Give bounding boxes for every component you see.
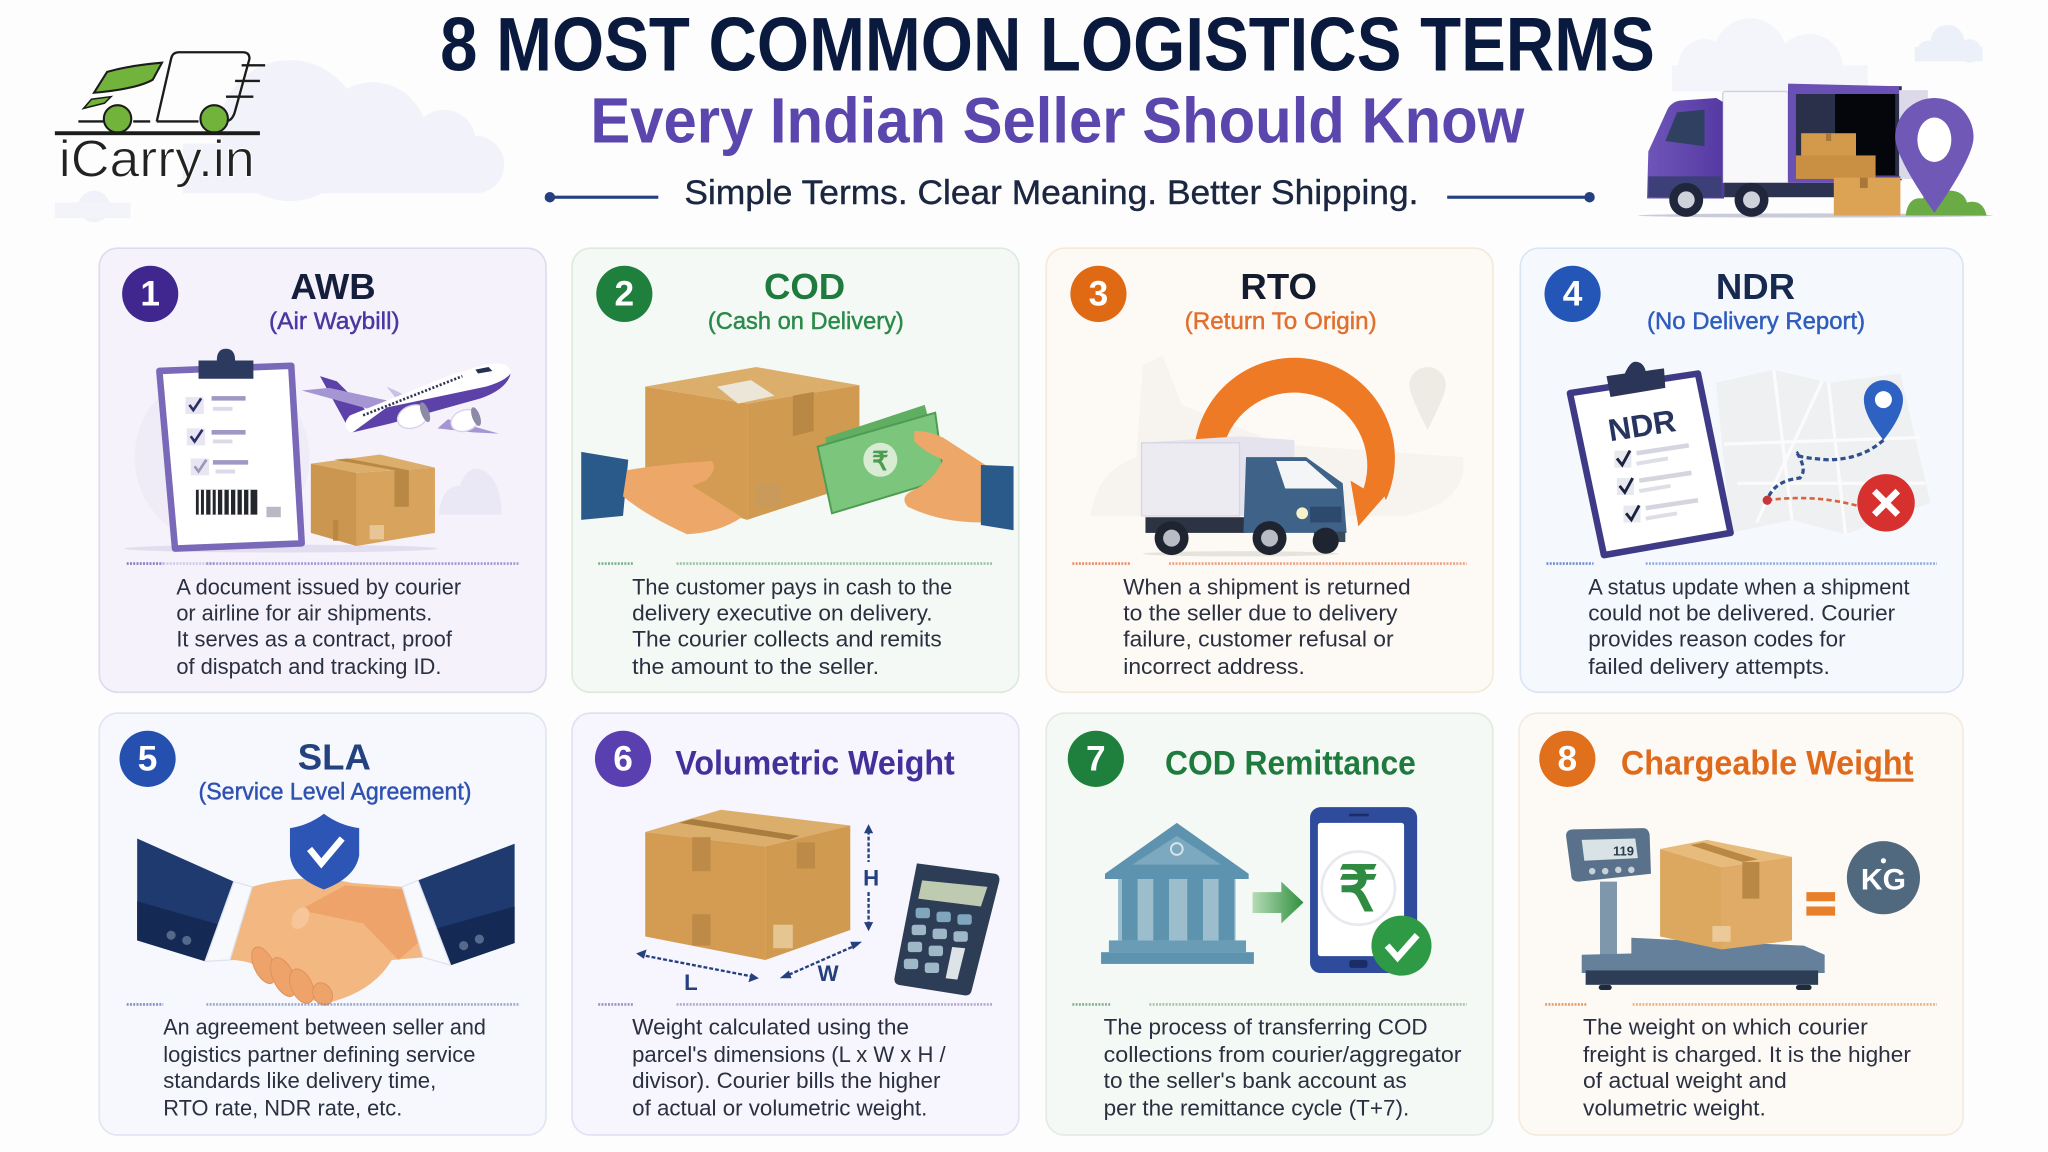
scale	[1566, 828, 1825, 990]
logo: iCarry.in	[55, 52, 265, 188]
card background	[1046, 248, 1493, 692]
plane	[302, 363, 511, 435]
number badge 7	[1068, 731, 1124, 787]
panel: AWB	[99, 248, 546, 692]
description: When a shipment is returned	[1123, 574, 1411, 599]
illustration: NDR clipboard and route map: NDR	[1606, 403, 1678, 448]
illustration: parcel handed over for cash: ₹	[872, 446, 889, 476]
description	[176, 574, 462, 679]
number badge 3: 3	[1089, 275, 1108, 314]
divider	[1545, 1003, 1937, 1005]
description: of actual or volumetric weight.	[632, 1095, 927, 1120]
subheading: (No Delivery Report)	[1647, 308, 1865, 335]
number badge 5	[120, 731, 176, 787]
description: volumetric weight.	[1583, 1095, 1766, 1120]
parcel	[311, 455, 435, 546]
scale: 119	[1613, 844, 1634, 859]
description: The process of transferring COD	[1104, 1014, 1428, 1039]
subheading: (Air Waybill)	[269, 308, 400, 335]
illustration: box dimensions and calculator: L	[684, 970, 698, 995]
title: 8 MOST COMMON LOGISTICS TERMS	[440, 3, 1655, 88]
tagline text: Simple Terms. Clear Meaning. Better Shipping.	[684, 174, 1418, 212]
illustration: NDR clipboard and route map	[1570, 362, 1930, 555]
description: The weight on which courier	[1583, 1014, 1868, 1039]
illustration: bank to phone transfer	[1101, 807, 1432, 976]
number badge 6: 6	[613, 740, 633, 779]
divider	[1546, 563, 1937, 565]
heading AWB: AWB	[290, 266, 376, 307]
logo wordmark: iCarry.in	[59, 130, 255, 188]
panel: RTO	[1046, 248, 1493, 692]
description: divisor). Courier bills the higher	[632, 1068, 941, 1093]
card background	[99, 248, 546, 692]
phone	[1310, 807, 1417, 973]
description: could not be delivered. Courier	[1588, 600, 1896, 625]
divider	[598, 1003, 993, 1005]
subheading: (Return To Origin)	[1185, 308, 1377, 335]
number badge 8: 8	[1558, 740, 1577, 779]
illustration: box dimensions and calculator	[636, 810, 999, 995]
parcel	[1660, 840, 1792, 950]
logo truck icon	[55, 52, 265, 135]
subheading: (Cash on Delivery)	[708, 308, 904, 335]
illustration: handshake and shield	[137, 814, 515, 1009]
description	[1583, 1014, 1911, 1120]
divider	[1072, 1003, 1467, 1005]
bank	[1101, 823, 1254, 964]
description: provides reason codes for	[1588, 627, 1846, 652]
description: Weight calculated using the	[632, 1014, 909, 1039]
divider	[127, 1003, 520, 1005]
description: It serves as a contract, proof	[176, 627, 453, 652]
calculator	[894, 863, 999, 995]
illustration: box dimensions and calculator: H	[863, 866, 879, 891]
description: RTO rate, NDR rate, etc.	[163, 1095, 402, 1120]
description: or airline for air shipments.	[176, 600, 432, 625]
number badge 1	[122, 266, 178, 322]
description	[632, 1014, 946, 1120]
dimension arrows	[636, 824, 873, 982]
heading COD: COD	[764, 266, 845, 307]
description: A document issued by courier	[176, 574, 462, 599]
number badge 5: 5	[138, 740, 157, 779]
subheading: (Service Level Agreement)	[199, 778, 472, 805]
heading NDR: NDR	[1716, 266, 1795, 307]
description	[632, 574, 952, 679]
description	[1104, 1014, 1462, 1120]
illustration: clipboard, plane and box	[124, 349, 511, 552]
number badge 2	[596, 266, 652, 322]
description: collections from courier/aggregator	[1104, 1042, 1462, 1067]
number badge 3	[1070, 266, 1127, 322]
check badge	[1371, 916, 1432, 976]
description: failure, customer refusal or	[1123, 627, 1394, 652]
card background	[1520, 248, 1963, 692]
tagline with rules	[545, 174, 1595, 212]
panel: COD Remittance	[1046, 713, 1493, 1135]
heading: Volumetric Weight	[675, 745, 955, 783]
KG weight badge	[1847, 841, 1920, 914]
number badge 1: 1	[140, 275, 160, 314]
transfer arrow	[1253, 882, 1304, 923]
card background	[572, 248, 1019, 692]
description: logistics partner defining service	[163, 1042, 475, 1067]
description	[163, 1014, 486, 1120]
description: per the remittance cycle (T+7).	[1104, 1095, 1409, 1120]
heading RTO: RTO	[1240, 266, 1317, 307]
phone: ₹	[1338, 854, 1378, 924]
heading: COD Remittance	[1165, 745, 1416, 783]
illustration: truck with return arrow	[1091, 355, 1463, 556]
KG weight badge: KG	[1861, 863, 1906, 896]
panel: NDR	[1520, 248, 1963, 692]
description: The courier collects and remits	[632, 627, 942, 652]
description: of dispatch and tracking ID.	[176, 654, 441, 679]
description: of actual weight and	[1583, 1068, 1787, 1093]
description: An agreement between seller and	[163, 1014, 486, 1039]
description: to the seller's bank account as	[1104, 1068, 1407, 1093]
description: the amount to the seller.	[632, 654, 879, 679]
divider	[1072, 563, 1467, 565]
card background	[99, 713, 546, 1135]
card background	[1046, 713, 1493, 1135]
description: The customer pays in cash to the	[632, 574, 952, 599]
number badge 7: 7	[1086, 740, 1106, 779]
description: freight is charged. It is the higher	[1583, 1042, 1911, 1067]
number badge 2: 2	[615, 275, 634, 314]
divider	[598, 563, 993, 565]
panel: COD	[572, 248, 1019, 692]
number badge 6	[595, 731, 651, 787]
heading SLA: SLA	[298, 736, 371, 777]
description	[1123, 574, 1411, 679]
description: incorrect address.	[1123, 654, 1305, 679]
divider	[127, 563, 520, 565]
number badge 4	[1544, 266, 1601, 322]
illustration: weighing scale equals KG	[1566, 828, 1920, 990]
equals sign	[1806, 892, 1835, 916]
panel: Chargeable Weight	[1519, 713, 1963, 1135]
icon: delivery truck with location pin	[1638, 84, 1993, 218]
panel: SLA	[99, 713, 546, 1135]
header background clouds	[55, 18, 1983, 222]
card background	[572, 713, 1019, 1135]
description: failed delivery attempts.	[1588, 654, 1830, 679]
description: to the seller due to delivery	[1123, 600, 1398, 625]
illustration: box dimensions and calculator: W	[818, 961, 839, 986]
description: parcel's dimensions (L x W x H /	[632, 1042, 946, 1067]
number badge 4: 4	[1563, 275, 1583, 314]
description: A status update when a shipment	[1588, 574, 1910, 599]
panel: Volumetric Weight	[572, 713, 1019, 1135]
card background	[1519, 713, 1963, 1135]
number badge 8	[1539, 731, 1595, 787]
description: standards like delivery time,	[163, 1068, 436, 1093]
description	[1588, 574, 1910, 679]
description: delivery executive on delivery.	[632, 600, 933, 625]
heading: Chargeable Weight	[1621, 745, 1913, 783]
illustration: parcel handed over for cash	[581, 367, 1014, 534]
subtitle: Every Indian Seller Should Know	[590, 84, 1524, 156]
